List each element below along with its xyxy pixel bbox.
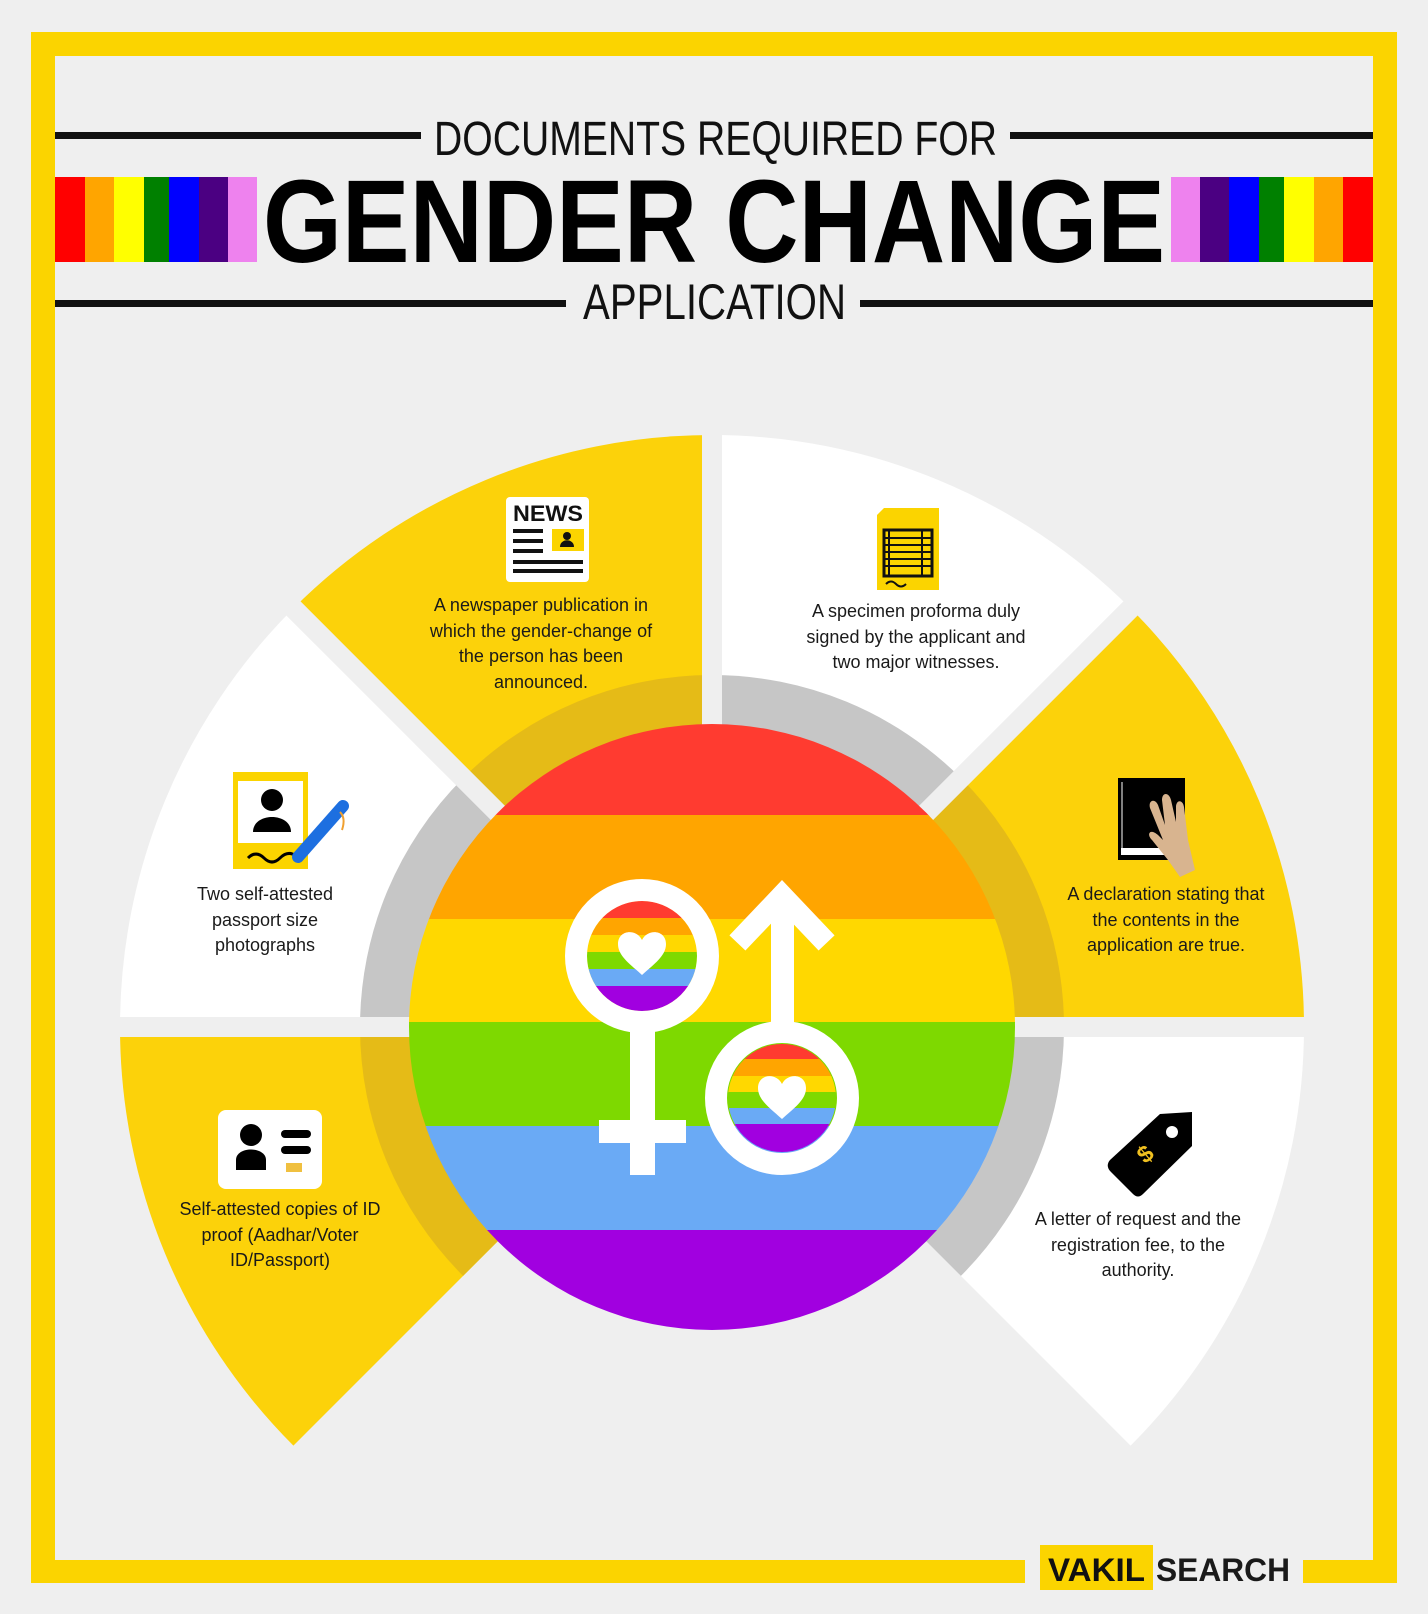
icon: price tag: $ (1132, 1140, 1160, 1169)
icon: female symbol (576, 890, 710, 1175)
panel: specimen proforma: A specimen proforma duly (812, 601, 1020, 621)
panel: fee: authority. (1102, 1260, 1174, 1280)
title: DOCUMENTS REQUIRED FOR (434, 113, 997, 166)
icon: news: NEWS (513, 501, 583, 526)
sectors (100, 420, 1324, 1446)
panel: newspaper: which the gender-change of (429, 621, 653, 641)
icon: photo with pen (233, 772, 344, 869)
logo: SEARCH (1156, 1552, 1290, 1588)
panel: fee (1035, 1112, 1241, 1280)
panel: ID proof: proof (Aadhar/Voter (201, 1225, 359, 1245)
panel: newspaper: A newspaper publication in (434, 595, 648, 615)
panel: specimen proforma: signed by the applicant and (806, 627, 1026, 647)
panel: specimen proforma: two major witnesses. (832, 652, 1000, 672)
panel: newspaper: announced. (494, 672, 588, 692)
icon: male symbol (716, 895, 850, 1164)
panel: photographs: passport size (212, 910, 318, 930)
panel: photographs: Two self-attested (197, 884, 333, 904)
panel: declaration: the contents in the (1092, 910, 1240, 930)
panel: ID proof: Self-attested copies of ID (179, 1199, 381, 1219)
logo: VAKIL (1048, 1552, 1145, 1588)
icon: price tag (1108, 1112, 1192, 1196)
panel: declaration: application are true. (1087, 935, 1245, 955)
panel: newspaper (429, 497, 653, 692)
panel: fee: registration fee, to the (1051, 1235, 1225, 1255)
logo (1040, 1545, 1290, 1590)
panel: photographs: photographs (215, 935, 315, 955)
panel: declaration (1067, 778, 1265, 955)
title: GENDER CHANGE (263, 156, 1165, 288)
panel: ID proof: ID/Passport) (230, 1250, 330, 1270)
panel: fee: A letter of request and the (1035, 1209, 1241, 1229)
panel: ID proof (179, 1110, 381, 1270)
title: APPLICATION (583, 274, 846, 330)
rainbow circle (400, 720, 1030, 1340)
icon: hand on book (1118, 778, 1195, 877)
panel: declaration: A declaration stating that (1067, 884, 1265, 904)
panel: specimen proforma (806, 508, 1026, 672)
icon: news (506, 497, 589, 582)
panel: newspaper: the person has been (459, 646, 623, 666)
icon: form (877, 508, 939, 590)
icon: ID card (218, 1110, 322, 1189)
title (55, 113, 1373, 330)
panel: photographs (197, 772, 344, 955)
